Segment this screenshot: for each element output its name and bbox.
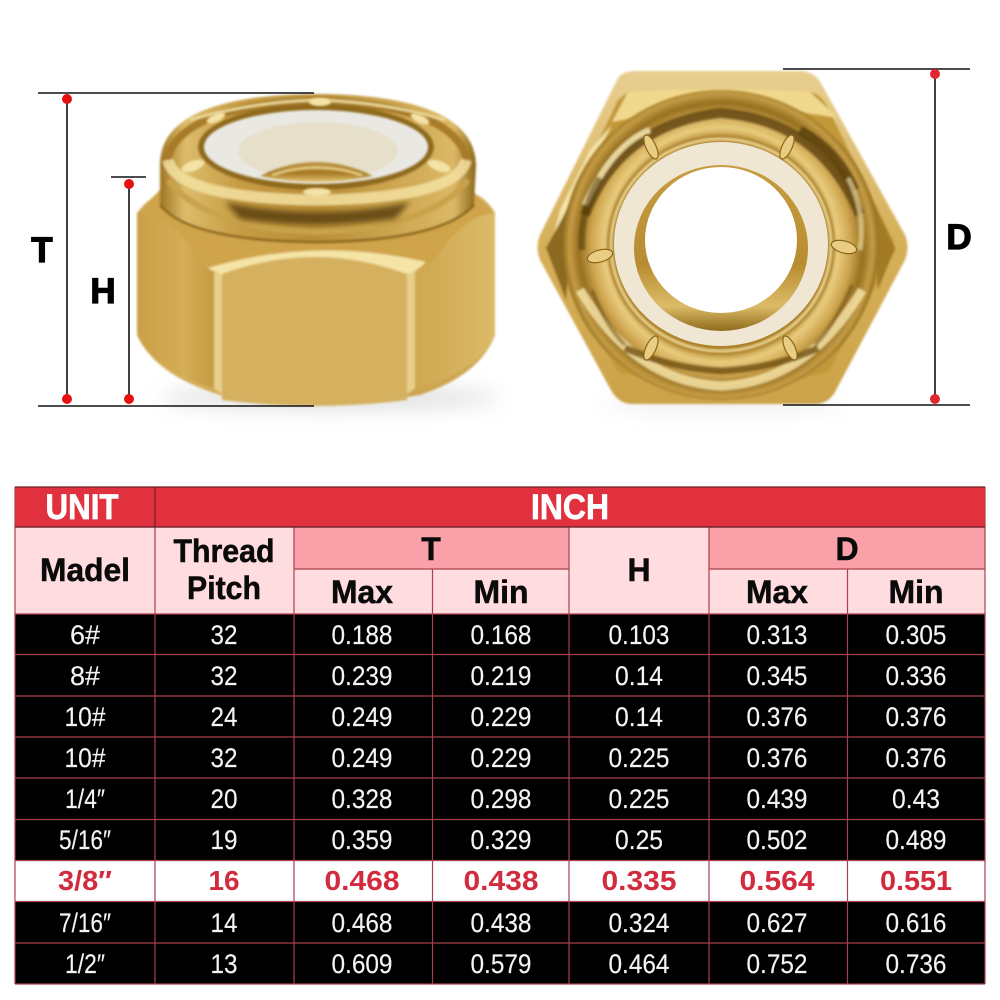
row 8#: 0.14 [615, 661, 663, 691]
row 1/2 inch: 0.464 [608, 949, 670, 979]
table header: unit and inch [15, 487, 985, 527]
collar rivet marks [586, 133, 858, 362]
row 7/16 inch [59, 908, 946, 938]
table header: column names: H [627, 552, 651, 588]
row 5/16 inch: 0.359 [332, 825, 392, 855]
row 6#: 0.168 [470, 620, 532, 650]
row 3/8 inch highlighted: 0.551 [880, 865, 952, 896]
row 8#: 32 [210, 661, 238, 691]
illustration: nylon lock nut side view [137, 94, 500, 408]
shadow under front-view nut [602, 398, 842, 408]
row 10# pitch 32: 32 [210, 743, 238, 773]
row 3/8 inch highlighted: 0.438 [464, 865, 538, 896]
row 6#: 0.188 [332, 620, 392, 650]
row 10# pitch 24: 0.229 [470, 702, 532, 732]
table header: unit and inch: INCH [531, 488, 609, 527]
row 6#: 6# [70, 620, 100, 650]
row 6#: 0.103 [608, 620, 670, 650]
row 5/16 inch [59, 825, 946, 855]
dimension H: H [90, 272, 116, 311]
dimension T: T [31, 231, 53, 270]
table body background [15, 614, 985, 984]
row 10# pitch 24: 10# [64, 702, 106, 732]
specification table [15, 487, 985, 984]
collar of side-view nut [160, 94, 476, 242]
row 1/4 inch: 0.225 [608, 784, 670, 814]
row 7/16 inch: 7/16″ [59, 908, 111, 938]
threaded hole [634, 165, 808, 331]
table header: column names: Pitch [187, 570, 261, 606]
row 7/16 inch: 14 [210, 908, 238, 938]
row 6# [70, 620, 946, 650]
row 7/16 inch: 0.627 [746, 908, 808, 938]
white nylon ring [614, 142, 828, 346]
row 3/8 inch highlighted: 0.335 [602, 865, 676, 896]
row 1/2 inch: 0.752 [746, 949, 808, 979]
row 3/8 inch highlighted [58, 865, 952, 896]
table header: column names [15, 527, 985, 614]
dimension H [90, 177, 146, 404]
row 10# pitch 32: 10# [64, 743, 106, 773]
row 1/4 inch: 1/4″ [65, 784, 105, 814]
shadow under side-view nut [160, 388, 500, 408]
row 10# pitch 24 [64, 702, 946, 732]
row 1/4 inch: 0.43 [892, 784, 940, 814]
row 6#: 32 [210, 620, 238, 650]
row 3/8 inch highlighted: 0.564 [740, 865, 815, 896]
collar notches [180, 98, 452, 196]
row 7/16 inch: 0.616 [886, 908, 946, 938]
row 1/4 inch: 0.439 [746, 784, 808, 814]
table header: column names: Max [331, 574, 393, 610]
row 1/2 inch: 1/2″ [65, 949, 105, 979]
row 1/4 inch [65, 784, 940, 814]
row 10# pitch 32: 0.229 [470, 743, 532, 773]
row 1/2 inch: 13 [210, 949, 238, 979]
row 6#: 0.313 [746, 620, 808, 650]
row 5/16 inch: 0.329 [470, 825, 532, 855]
illustration: nylon lock nut front view [538, 71, 908, 408]
row 5/16 inch: 19 [210, 825, 238, 855]
hexagon body [538, 71, 908, 404]
row 10# pitch 32: 0.225 [608, 743, 670, 773]
table header: column names: T [421, 531, 441, 567]
row 3/8 inch highlighted: 0.468 [324, 865, 400, 896]
table header: column names: Madel [40, 552, 130, 588]
row 8#: 0.239 [332, 661, 392, 691]
table header: column names: Min [474, 574, 528, 610]
row 5/16 inch: 5/16″ [59, 825, 111, 855]
row 10# pitch 32: 0.376 [746, 743, 808, 773]
row 8#: 8# [70, 661, 100, 691]
row 1/4 inch: 0.328 [332, 784, 392, 814]
row 8#: 0.219 [470, 661, 532, 691]
dark reflection band on collar [225, 202, 410, 224]
row 1/2 inch: 0.579 [470, 949, 532, 979]
row 7/16 inch: 0.468 [332, 908, 392, 938]
table header: column names: Thread [174, 533, 274, 569]
highlighted row background [15, 860, 985, 902]
dimension D: D [946, 218, 972, 257]
row 8# [70, 661, 946, 691]
row 10# pitch 32 [64, 743, 946, 773]
row 10# pitch 24: 24 [210, 702, 238, 732]
row 10# pitch 24: 0.14 [615, 702, 663, 732]
table header: unit and inch: UNIT [46, 488, 118, 527]
hex body of side-view nut [137, 190, 495, 406]
row 10# pitch 24: 0.376 [886, 702, 946, 732]
table header: column names: Min [888, 574, 944, 610]
dimension D [783, 69, 972, 405]
row 1/4 inch: 20 [210, 784, 238, 814]
table header: column names: Max [746, 574, 808, 610]
row 8#: 0.336 [886, 661, 946, 691]
row 7/16 inch: 0.438 [470, 908, 532, 938]
row 8#: 0.345 [746, 661, 808, 691]
row 1/4 inch: 0.298 [470, 784, 532, 814]
white nylon insert [204, 110, 428, 184]
row 10# pitch 24: 0.249 [332, 702, 392, 732]
row 5/16 inch: 0.502 [746, 825, 808, 855]
row 10# pitch 32: 0.376 [886, 743, 946, 773]
row 3/8 inch highlighted: 16 [208, 865, 240, 896]
row 7/16 inch: 0.324 [608, 908, 670, 938]
row 10# pitch 24: 0.376 [746, 702, 808, 732]
row 1/2 inch [65, 949, 946, 979]
domed collar ring [563, 90, 879, 400]
thread inside side-view nut [260, 162, 373, 182]
row 1/2 inch: 0.736 [886, 949, 946, 979]
row 5/16 inch: 0.489 [886, 825, 946, 855]
table header: column names: D [835, 531, 859, 567]
row 1/2 inch: 0.609 [332, 949, 392, 979]
row 10# pitch 32: 0.249 [332, 743, 392, 773]
row 3/8 inch highlighted: 3/8″ [58, 865, 112, 896]
row 5/16 inch: 0.25 [615, 825, 663, 855]
dimension T [31, 93, 314, 406]
row 6#: 0.305 [886, 620, 946, 650]
